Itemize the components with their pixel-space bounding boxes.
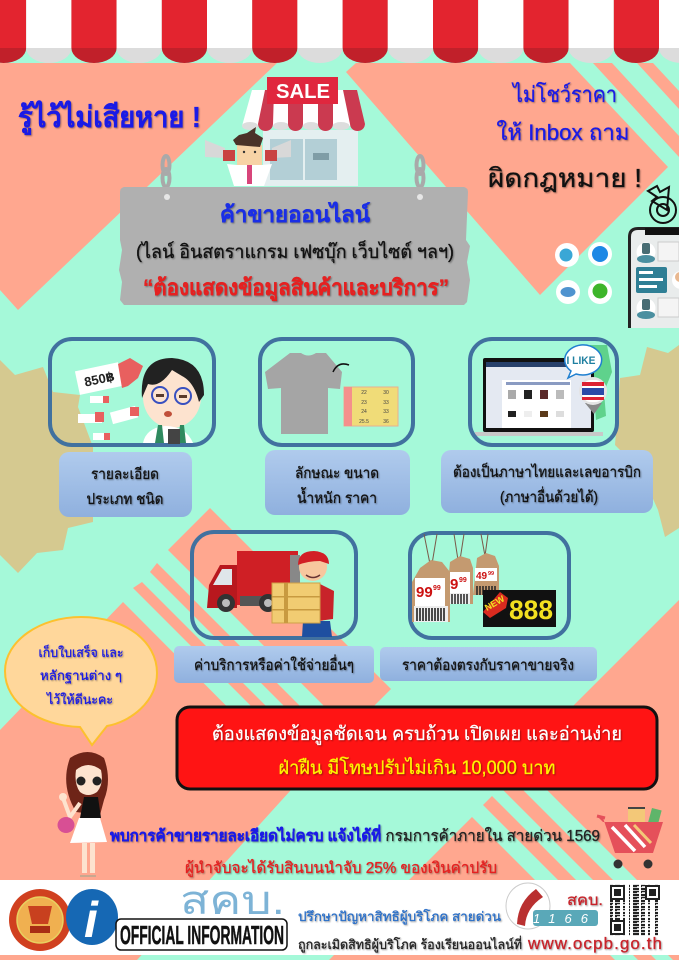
caption: characteristics, size, weight, price: น้ำหนัก ราคา [297,487,377,507]
logo: official information: OFFICIAL INFORMATION [120,920,284,950]
panel: footer [0,879,679,955]
panel: seller with price tags: 850฿ [83,368,116,390]
caption: price must match actual [380,647,597,681]
caption: details, type: รายละเอียด [91,466,159,483]
caption: price must match actual: ราคาต้องตรงกับราคาขายจริง [402,657,574,674]
callout: keep receipts: หลักฐานต่าง ๆ [40,668,122,684]
caption: thai language and arabic numerals: (ภาษาอื่นด้วยได้) [500,486,598,506]
logo: official information [116,919,287,950]
panel: price tags: 99 [488,571,494,577]
icon: phone 1166: 1166 [533,911,597,926]
panel: t-shirt with size table: 33 [383,409,389,415]
panel: red warning box: ต้องแสดงข้อมูลชัดเจน ครบถ้วน เปิดเผย และอ่านง่าย [212,724,622,745]
text: report line: พบการค้าขายรายละเอียดไม่ครบ แจ้งได้ที่ กรมการค้าภายใน สายด่วน 1569 [110,824,600,845]
heading: no price shown [488,82,642,193]
icons: social apps [555,242,612,304]
panel: laptop with thai flag: I LIKE [566,355,596,367]
panel: price tags: 99 [459,577,467,584]
callout: keep receipts: เก็บใบเสร็จ และ [38,643,124,660]
panel: price tags: 888 [509,595,553,625]
logo: ocpb letters: สคบ. [180,879,285,923]
panel: t-shirt with size table: 22 [361,390,367,396]
text: complaints online: ถูกละเมิดสิทธิผู้บริโภค ร้องเรียนออนไลน์ที่ [298,936,522,953]
icon: sale shop with megaphone man [205,77,365,186]
heading: no price shown: ผิดกฎหมาย ! [488,163,642,193]
panel: red warning box: ฝ่าฝืน มีโทษปรับไม่เกิน 10,000 บาท [278,756,556,779]
sign chains [162,156,424,187]
heading: no price shown: ไม่โชว์ราคา [511,82,617,107]
text: website: www.ocpb.go.th [527,934,662,953]
panel: price tags: 99 [416,584,433,601]
caption: service charge or other expenses [174,646,374,683]
panel: price tags: 49 [476,571,488,582]
panel: t-shirt with size table: 36 [383,419,389,425]
panel: red warning box [177,707,657,789]
panel: t-shirt with size table [260,339,413,445]
caption: thai language and arabic numerals: ต้องเป็นภาษาไทยและเลขอารบิก [453,462,641,481]
caption: characteristics, size, weight, price [265,450,410,515]
panel: t-shirt with size table: 24 [361,409,367,415]
panel: hanging sign [119,187,470,305]
callout: keep receipts [5,617,157,745]
icon: sale shop with megaphone man: SALE [276,81,330,103]
caption: service charge or other expenses: ค่าบริการหรือค่าใช้จ่ายอื่นๆ [194,654,354,674]
panel: seller with price tags [50,339,214,445]
text: consumer hotline: ปรึกษาปัญหาสิทธิผู้บริโภค สายด่วน [298,909,501,925]
icon: phone 1166: สคบ. [567,892,603,909]
panel: price tags: 9 [450,576,458,593]
heading: know and lose nothing: รู้ไว้ไม่เสียหาย ! [18,100,201,135]
panel: t-shirt with size table: 30 [383,390,389,396]
panel: hanging sign: (ไลน์ อินสตราแกรม เฟซบุ๊ก เว็บไซต์ ฯลฯ) [136,239,454,264]
caption: characteristics, size, weight, price: ลักษณะ ขนาด [295,465,379,482]
text: reward line: ผู้นำจับจะได้รับสินบนนำจับ 25% ของเงินค่าปรับ [185,859,497,878]
icon: phone with chat list [628,227,679,328]
callout: keep receipts: ไว้ให้ดีนะคะ [46,692,113,707]
icon: girl character [58,752,108,876]
icon: info i: i [84,892,99,948]
panel: t-shirt with size table: 25.5 [359,419,369,425]
heading: no price shown: ให้ Inbox ถาม [496,120,630,145]
icon: phone 1166 [506,883,603,929]
panel: price tags [410,533,569,638]
panel: t-shirt with size table: 23 [361,400,367,406]
icon: government seal [9,889,71,951]
icon: cursor click [648,186,676,223]
panel: hanging sign: “ต้องแสดงข้อมูลสินค้าและบริการ” [143,275,449,302]
panel: price tags: NEW [483,593,507,613]
panel: delivery truck [192,532,356,638]
caption: thai language and arabic numerals [441,450,653,513]
panel: laptop with thai flag [470,339,617,445]
awning [0,0,679,63]
icon: qr code [610,885,660,935]
caption: details, type [59,452,192,517]
caption: details, type: ประเภท ชนิด [86,491,164,508]
panel: price tags: 99 [433,585,441,592]
icon: shopping cart [597,807,663,868]
panel: hanging sign: ค้าขายออนไลน์ [220,201,370,227]
icon: info i [66,889,118,948]
panel: t-shirt with size table: 33 [383,400,389,406]
